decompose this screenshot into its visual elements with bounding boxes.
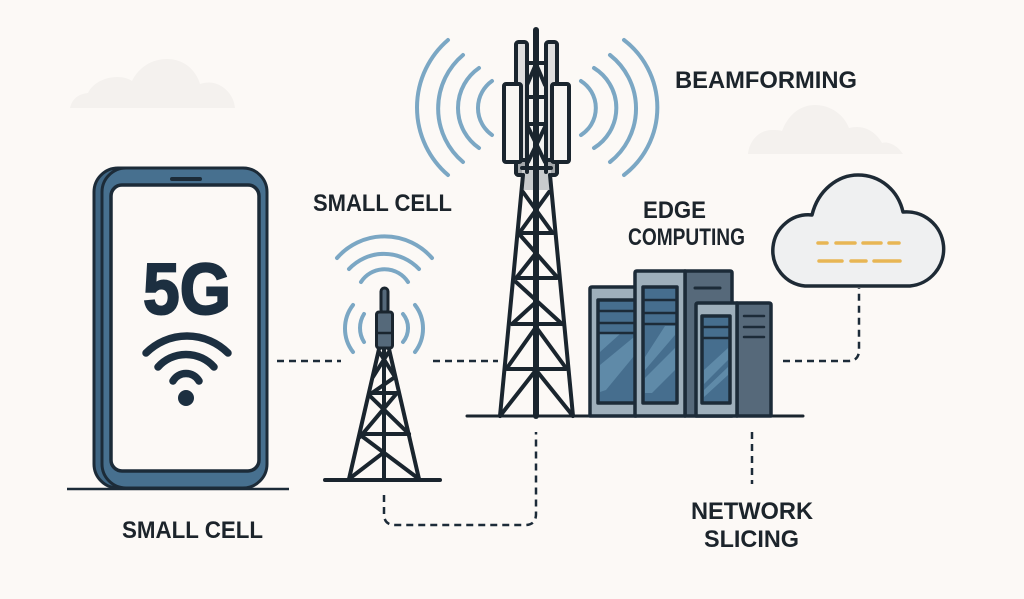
small cell lattice xyxy=(325,349,440,480)
server 1 xyxy=(590,287,636,416)
label: small cell bottom: SMALL CELL xyxy=(122,517,263,544)
label: edge computing: COMPUTING xyxy=(628,224,745,251)
icon: cloud xyxy=(773,175,944,286)
label: edge computing: EDGE xyxy=(643,197,706,224)
macro tower lattice xyxy=(467,30,803,416)
label: small cell top: SMALL CELL xyxy=(313,190,452,217)
front antenna panels xyxy=(504,84,569,162)
label: beamforming: BEAMFORMING xyxy=(675,67,857,94)
small cell signal waves xyxy=(337,236,432,352)
icon: macro tower with beamforming xyxy=(417,30,803,416)
background cloud left xyxy=(70,59,235,108)
label: network slicing: NETWORK xyxy=(691,498,814,525)
icon: smartphone with 5G xyxy=(94,168,267,488)
icon: edge computing servers xyxy=(590,271,771,416)
server 2 xyxy=(635,271,732,416)
label: edge computing xyxy=(628,197,745,251)
label: network slicing: SLICING xyxy=(704,526,799,553)
connector: servers to cloud xyxy=(783,288,859,361)
connector: small cell to macro tower xyxy=(433,360,498,362)
phone ground line xyxy=(67,488,289,490)
rear antenna panels xyxy=(516,42,557,175)
5G text: 5G xyxy=(143,250,231,330)
cloud data dashes xyxy=(818,243,900,261)
connector: small cell to macro tower below xyxy=(384,432,536,525)
background cloud right xyxy=(748,105,903,154)
connector: servers to network slicing xyxy=(751,432,753,484)
server 3 xyxy=(696,303,771,416)
beamforming waves xyxy=(417,40,657,175)
tower shaded collar xyxy=(527,63,546,168)
icon: small cell tower xyxy=(325,236,440,480)
small cell antenna xyxy=(381,288,388,313)
label: network slicing xyxy=(691,498,814,553)
icon: wifi signal xyxy=(146,336,228,406)
connector: phone to small cell xyxy=(277,360,341,362)
